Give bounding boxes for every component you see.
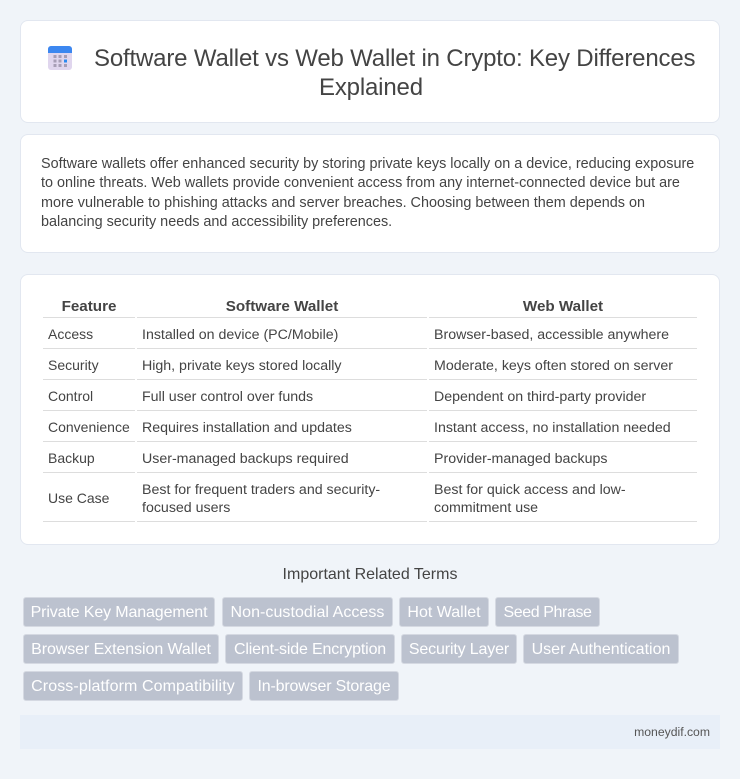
comparison table: Installed on device (PC/Mobile) — [142, 327, 338, 343]
comparison table: Moderate, keys often stored on server — [434, 358, 673, 374]
tag: Private Key Management — [31, 604, 207, 621]
tags: related terms — [23, 597, 679, 701]
panel: intro text: to online threats. Web wallets provide convenient access from any internet-connected device but are — [41, 175, 680, 191]
tag: Security Layer — [409, 641, 509, 658]
panel: intro text — [20, 134, 720, 253]
panel: intro text: more vulnerable to phishing attacks and server breaches. Choosing between them depends on — [41, 195, 645, 211]
tag: User Authentication — [532, 641, 670, 658]
tag — [495, 597, 600, 627]
title: Explained — [319, 74, 423, 101]
comparison table: Use Case — [48, 490, 109, 506]
tag: Browser Extension Wallet — [31, 641, 211, 658]
tag: Client-side Encryption — [234, 641, 386, 658]
panel: comparison table — [20, 274, 720, 545]
panel: header — [20, 20, 720, 123]
tag — [225, 634, 395, 664]
icon: calendar app — [48, 46, 72, 70]
tag — [23, 597, 215, 627]
comparison table: Best for frequent traders and security-focused users — [142, 482, 380, 516]
panel: intro text: balancing security needs and accessibility preferences. — [41, 214, 392, 230]
tag — [23, 634, 219, 664]
comparison table: Control — [48, 388, 93, 404]
comparison table — [43, 298, 697, 522]
tag: Seed Phrase — [503, 604, 592, 621]
tag — [249, 671, 399, 701]
comparison table: Full user control over funds — [142, 389, 313, 405]
tag: Hot Wallet — [407, 604, 481, 621]
footer text: source: moneydif.com — [634, 725, 710, 739]
tag — [222, 597, 393, 627]
comparison table: Security — [48, 357, 99, 373]
tag — [523, 634, 679, 664]
comparison table: Browser-based, accessible anywhere — [434, 327, 669, 343]
comparison table: Web Wallet — [523, 298, 603, 314]
comparison table: Feature — [62, 298, 116, 314]
tag — [399, 597, 489, 627]
tag: Non-custodial Access — [231, 604, 384, 621]
comparison table: Instant access, no installation needed — [434, 420, 671, 436]
comparison table: Best for quick access and low-commitment use — [434, 482, 626, 516]
tag: In-browser Storage — [257, 678, 390, 695]
comparison table: Backup — [48, 450, 95, 466]
footer bar — [20, 715, 720, 749]
comparison table: High, private keys stored locally — [142, 358, 342, 374]
tag: Cross-platform Compatibility — [31, 678, 235, 695]
title: Software Wallet vs Web Wallet in Crypto: Key Differences — [94, 45, 695, 72]
tag — [23, 671, 243, 701]
tag — [401, 634, 517, 664]
heading: related terms: Important Related Terms — [283, 566, 457, 583]
comparison table: Access — [48, 326, 93, 342]
comparison table: Provider-managed backups — [434, 451, 608, 467]
comparison table: Convenience — [48, 419, 130, 435]
comparison table: User-managed backups required — [142, 451, 349, 467]
panel: intro text: Software wallets offer enhanced security by storing private keys locally on a device, reducing exposure — [41, 156, 694, 172]
comparison table: Requires installation and updates — [142, 420, 352, 436]
comparison table: Dependent on third-party provider — [434, 389, 646, 405]
title — [94, 45, 695, 101]
comparison table: Software Wallet — [226, 298, 338, 314]
